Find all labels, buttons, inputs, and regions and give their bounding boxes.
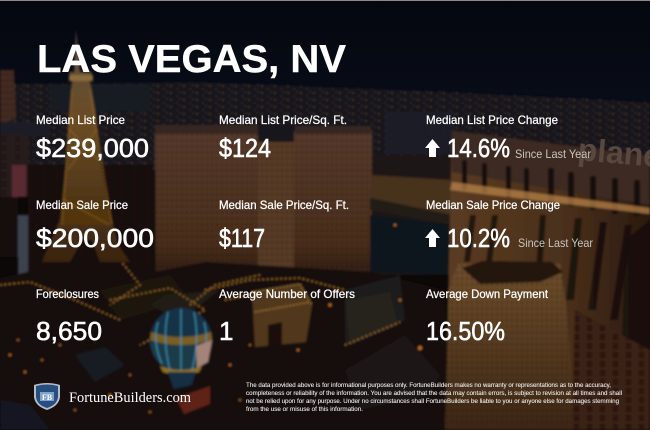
stat: median sale price per sq ft: $117 [219,223,265,253]
stat: median sale price change: Since Last Year [518,236,593,250]
stat: foreclosures [36,287,102,346]
stat: median sale price: Median Sale Price [36,198,128,212]
stat: average down payment: Average Down Payment [426,287,549,301]
stat: average number of offers: Average Number of Offers [219,287,355,301]
stat: median sale price change: 10.2% [447,223,510,253]
stat: median list price per sq ft: $124 [219,133,271,163]
stat: median sale price per sq ft: Median Sale Price/Sq. Ft. [219,198,349,212]
string lights [0,260,400,345]
stat: average number of offers: 1 [219,316,233,346]
stat: median list price change: 14.6% [447,133,510,163]
planet hollywood tower [445,131,650,430]
disclaimer: not be relied upon for any purpose. Under no circumstances shall FortuneBuilders be liable to you or anyone else for damages stemming [246,399,619,405]
stat: median sale price change: Median Sale Price Change [426,198,560,212]
lower corner block [445,264,576,430]
stat: median sale price per sq ft [219,198,349,253]
stat: median list price: $239,000 [36,133,149,163]
stat: median sale price change [425,198,593,253]
stat: median list price per sq ft [219,113,347,163]
stat: median list price change: Median List Price Change [426,113,558,127]
stat: median list price: Median List Price [36,113,125,127]
disclaimer: The data provided above is for informational purposes only. FortuneBuilders makes no warranty or representations as to the accuracy, [246,383,611,389]
disclaimer: completeness or reliability of the information. You are advised that the data may contain errors, is subject to revision at all times and shall [246,391,622,397]
stat: median sale price [36,198,154,253]
logo: FortuneBuilders [34,383,191,410]
stat: median list price [36,113,149,163]
icon: shield [34,383,60,410]
paris hotel [155,132,372,290]
stat: foreclosures: 8,650 [36,316,102,346]
icon: up arrow [425,139,440,157]
icon: up arrow [425,229,440,247]
balloon [150,308,212,372]
arc de triomphe [252,284,312,347]
eiffel tower [42,30,130,262]
stat: median sale price: $200,000 [36,223,154,253]
stat: average number of offers [219,287,355,346]
disclaimer: from the use or misuse of this information. [246,407,363,413]
stat: average down payment: 16.50% [426,316,505,346]
mid buildings [372,155,452,275]
stat: median list price change: Since Last Year [515,147,591,161]
left tower [0,70,16,125]
stat: median list price per sq ft: Median List Price/Sq. Ft. [219,113,347,127]
icon: shield: FB [42,393,53,402]
title: LAS VEGAS, NV [37,38,346,81]
disclaimer [246,383,622,413]
stat: median list price change [425,113,591,163]
stat: foreclosures: Foreclosures [36,287,99,301]
street level [0,258,445,430]
stat: average down payment [426,287,549,346]
logo: FortuneBuilders: FortuneBuilders.com [69,390,191,406]
